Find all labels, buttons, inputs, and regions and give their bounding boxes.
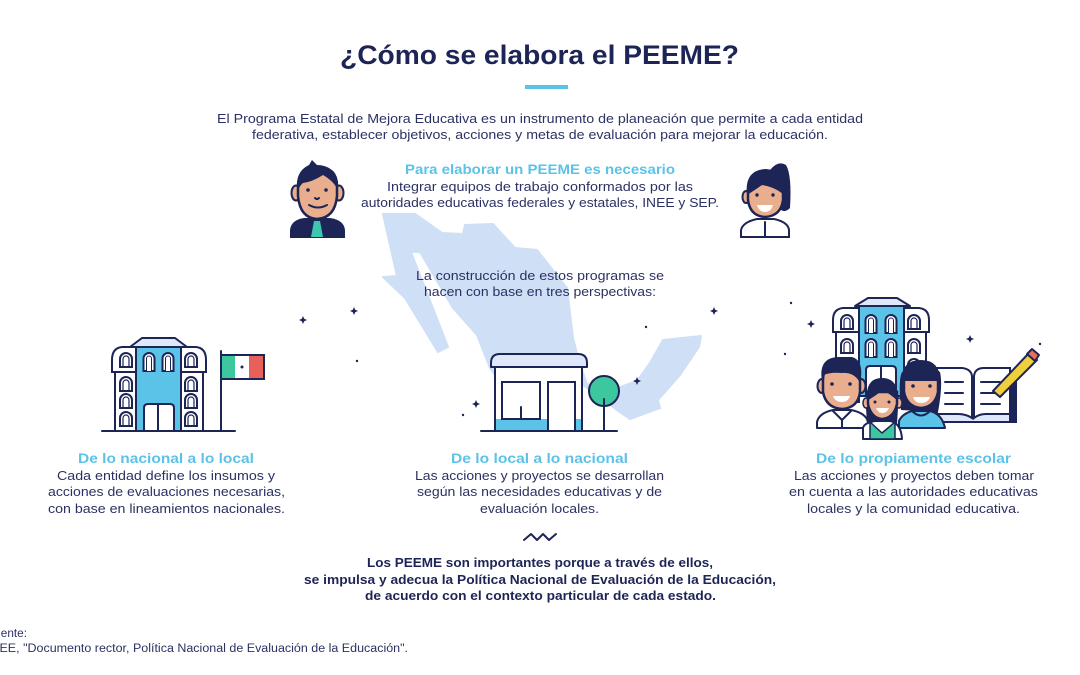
conclusion text bbox=[304, 555, 776, 603]
text: equipos de trabajo: Integrar equipos de trabajo conformados por las bbox=[387, 179, 694, 194]
column: de lo nacional a lo local: Cada entidad define los insumos y bbox=[57, 468, 276, 483]
column: de lo propiamente escolar: De lo propiamente escolar bbox=[816, 450, 1012, 466]
column: de lo propiamente escolar: locales y la comunidad educativa. bbox=[807, 501, 1020, 516]
column: de lo local a lo nacional: De lo local a lo nacional bbox=[451, 450, 628, 466]
icon: government building with flag bbox=[102, 338, 264, 431]
icon: woman avatar bbox=[741, 163, 790, 237]
conclusion text: se impulsa y adecua la Política Nacional de Evaluación de la Educación, bbox=[304, 572, 776, 587]
column: de lo nacional a lo local: con base en lineamientos nacionales. bbox=[48, 501, 285, 516]
column: de lo propiamente escolar: Las acciones y proyectos deben tomar bbox=[794, 468, 1035, 483]
column: de lo nacional a lo local: acciones de evaluaciones necesarias, bbox=[48, 484, 285, 499]
figure: man bbox=[817, 357, 868, 428]
intro text: El Programa Estatal de Mejora Educativa es un instrumento de planeación que permite a cada entidad bbox=[217, 111, 863, 126]
column: de lo propiamente escolar: en cuenta a las autoridades educativas bbox=[789, 484, 1039, 499]
figure: woman bbox=[899, 360, 945, 428]
icon: school, family and book bbox=[817, 298, 1039, 439]
column: de lo propiamente escolar bbox=[789, 450, 1039, 516]
column: de lo nacional a lo local: De lo nacional a lo local bbox=[78, 450, 254, 466]
map of Mexico bbox=[383, 214, 701, 419]
column: de lo local a lo nacional bbox=[415, 450, 664, 516]
icon: local store with tree bbox=[481, 354, 619, 431]
text: equipos de trabajo bbox=[361, 179, 719, 210]
text: tres perspectivas: hacen con base en tres perspectivas: bbox=[424, 284, 656, 299]
column: de lo local a lo nacional: evaluación locales. bbox=[480, 501, 599, 516]
intro text: federativa, establecer objetivos, acciones y metas de evaluación para mejorar la educación. bbox=[252, 127, 828, 142]
source footnote bbox=[0, 628, 408, 655]
heading: para elaborar: Para elaborar un PEEME es necesario bbox=[405, 161, 675, 177]
figure: student girl bbox=[863, 378, 902, 439]
text: tres perspectivas: La construcción de estos programas se bbox=[416, 268, 664, 283]
intro text bbox=[217, 111, 863, 142]
icon: man avatar bbox=[290, 160, 345, 238]
squiggle divider bbox=[524, 534, 556, 540]
conclusion text: Los PEEME son importantes porque a través de ellos, bbox=[367, 555, 713, 570]
text: equipos de trabajo: autoridades educativas federales y estatales, INEE y SEP. bbox=[361, 195, 719, 210]
text: tres perspectivas bbox=[416, 268, 664, 299]
column: de lo local a lo nacional: según las necesidades educativas y de bbox=[417, 484, 662, 499]
column: de lo nacional a lo local bbox=[48, 450, 285, 516]
title: ¿Cómo se elabora el PEEME? bbox=[340, 40, 739, 70]
decorative stars bbox=[299, 302, 1041, 416]
title underline accent bbox=[525, 85, 568, 89]
column: de lo local a lo nacional: Las acciones y proyectos se desarrollan bbox=[415, 468, 664, 483]
conclusion text: de acuerdo con el contexto particular de cada estado. bbox=[365, 588, 716, 603]
